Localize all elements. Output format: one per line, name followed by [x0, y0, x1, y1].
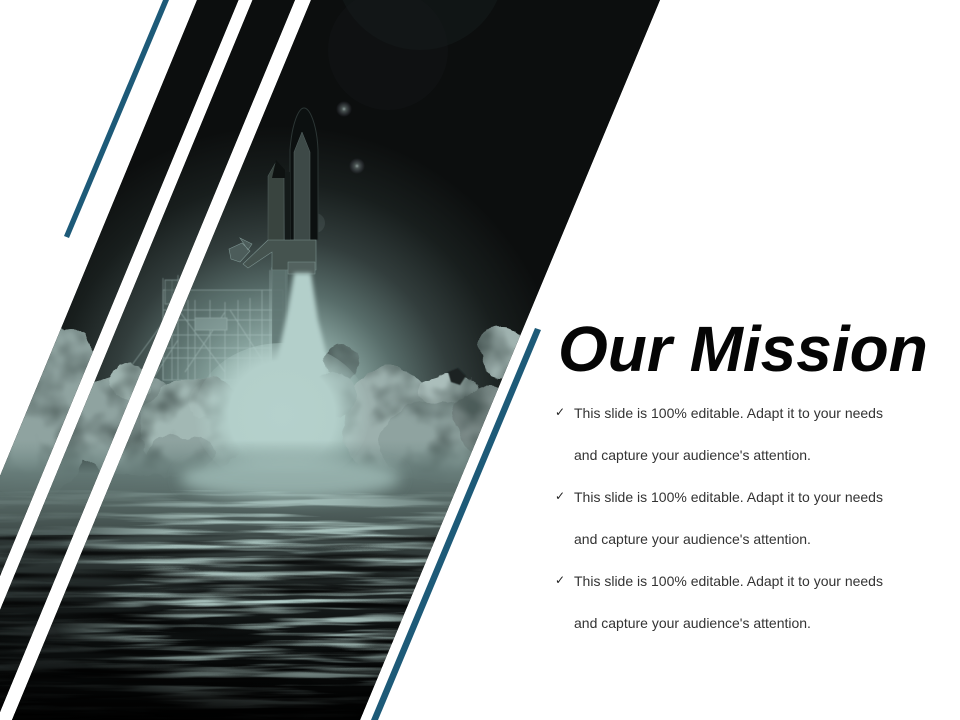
lower water fade: [0, 619, 394, 720]
dark cloud crevice: [448, 368, 466, 385]
exhaust plume: [278, 270, 328, 368]
space shuttle and boosters: [229, 108, 318, 360]
rocket exhaust glow: [0, 0, 680, 520]
bullet 1: [555, 405, 883, 463]
right clouds: [322, 326, 520, 483]
dark water ripples: [0, 535, 437, 716]
night sky background: [0, 0, 680, 720]
water surface base: [0, 444, 467, 720]
heading: Our Mission: [558, 313, 928, 385]
left cloud strips: [0, 328, 228, 495]
bullet 3: ✓: [555, 573, 565, 587]
accent line: upper left: [64, 0, 169, 238]
bullet 3: and capture your audience's attention.: [574, 615, 811, 631]
bullet 3: [555, 573, 883, 631]
bullet 1: and capture your audience's attention.: [574, 447, 811, 463]
bullet 3: This slide is 100% editable. Adapt it to your needs: [574, 573, 883, 589]
bullet list: [555, 405, 883, 631]
bullet 2: ✓: [555, 489, 565, 503]
bullet 2: This slide is 100% editable. Adapt it to your needs: [574, 489, 883, 505]
bullet 1: ✓: [555, 405, 565, 419]
water ripples: [0, 490, 454, 708]
bullet 1: This slide is 100% editable. Adapt it to your needs: [574, 405, 883, 421]
reflected glow near horizon: [180, 456, 400, 500]
accent line: lower right: [371, 328, 541, 720]
bullet 2: and capture your audience's attention.: [574, 531, 811, 547]
launch tower structure: [132, 268, 286, 380]
photo panel: slanted strips with rocket launch scene: [0, 0, 660, 720]
bright plume base: [202, 343, 362, 462]
lens flares in the sky: [318, 0, 448, 232]
bullet 2: [555, 489, 883, 547]
